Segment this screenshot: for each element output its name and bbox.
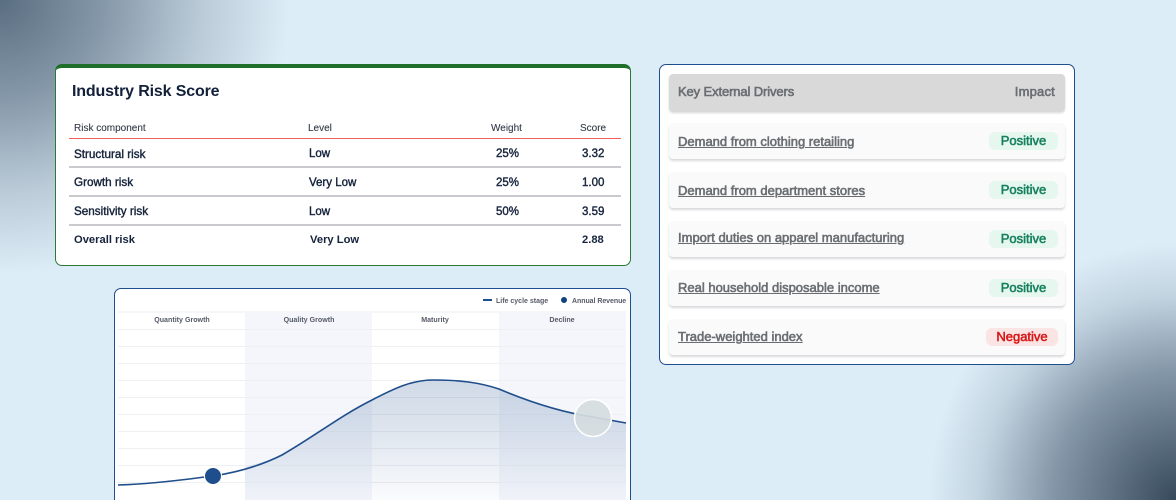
legend: Life cycle stage	[496, 298, 548, 305]
row: department stores: Demand from department stores	[678, 183, 865, 198]
row: growth risk	[74, 176, 604, 189]
row: clothing retailing	[669, 123, 1065, 159]
stage labels: Quantity Growth	[154, 316, 210, 324]
heading: industry risk score: Industry Risk Score	[72, 83, 219, 100]
marker: annual revenue	[204, 468, 222, 484]
row: overall risk: Overall risk	[74, 234, 135, 246]
life cycle curve	[118, 380, 626, 485]
stage labels: Quality Growth	[284, 316, 334, 324]
row: import duties: Import duties on apparel manufacturing	[678, 230, 904, 245]
marker: faded circle	[574, 400, 612, 436]
row: trade-weighted index: Negative	[996, 329, 1048, 344]
table header: Score	[580, 123, 606, 134]
area under curve	[245, 380, 626, 500]
row: overall risk	[74, 234, 604, 246]
row: sensitivity risk: Sensitivity risk	[74, 205, 148, 218]
panel: industry risk score	[55, 64, 631, 266]
row: department stores: Positive	[1001, 182, 1046, 197]
row: growth risk: Growth risk	[74, 176, 133, 189]
chart	[118, 297, 626, 500]
row: sensitivity risk: 50%	[496, 206, 519, 218]
row: growth risk: Very Low	[309, 177, 356, 189]
row: household income: Positive	[1001, 280, 1046, 295]
row: structural risk: 3.32	[582, 148, 604, 160]
row: structural risk: 25%	[496, 148, 519, 160]
row: sensitivity risk	[74, 205, 604, 218]
table header: Weight	[491, 123, 522, 134]
row: clothing retailing: Demand from clothing retailing	[678, 134, 854, 149]
panel: key external drivers	[659, 64, 1075, 365]
table header: Risk component	[74, 123, 146, 134]
row: overall risk: Very Low	[310, 234, 359, 246]
row: sensitivity risk: 3.59	[582, 206, 604, 218]
row: growth risk: 25%	[496, 177, 519, 189]
legend: Annual Revenue	[572, 298, 626, 305]
stage labels	[154, 316, 575, 324]
row: clothing retailing: Positive	[1001, 133, 1046, 148]
row: household income: Real household disposable income	[678, 280, 880, 295]
row: department stores	[669, 172, 1065, 208]
table header: Level	[308, 123, 332, 134]
row: import duties	[669, 221, 1065, 257]
table header: Impact	[1015, 84, 1055, 99]
panel: life cycle chart	[114, 288, 631, 500]
stage labels: Decline	[549, 316, 575, 324]
row: overall risk: 2.88	[582, 234, 604, 246]
table header	[74, 123, 606, 134]
header divider	[69, 138, 621, 139]
row: trade-weighted index: Trade-weighted index	[678, 329, 803, 344]
row: structural risk: Structural risk	[74, 148, 145, 161]
row: import duties: Positive	[1001, 231, 1046, 246]
row: sensitivity risk: Low	[309, 206, 330, 218]
row: household income	[669, 270, 1065, 306]
table header	[669, 74, 1065, 111]
legend	[483, 297, 626, 305]
row: structural risk	[74, 148, 604, 161]
row: growth risk: 1.00	[582, 177, 604, 189]
stage labels: Maturity	[421, 316, 449, 324]
table header: Key External Drivers	[678, 84, 794, 99]
grid lines	[118, 330, 626, 482]
row: structural risk: Low	[309, 148, 330, 160]
column bands	[118, 311, 626, 500]
row: trade-weighted index	[669, 319, 1065, 355]
